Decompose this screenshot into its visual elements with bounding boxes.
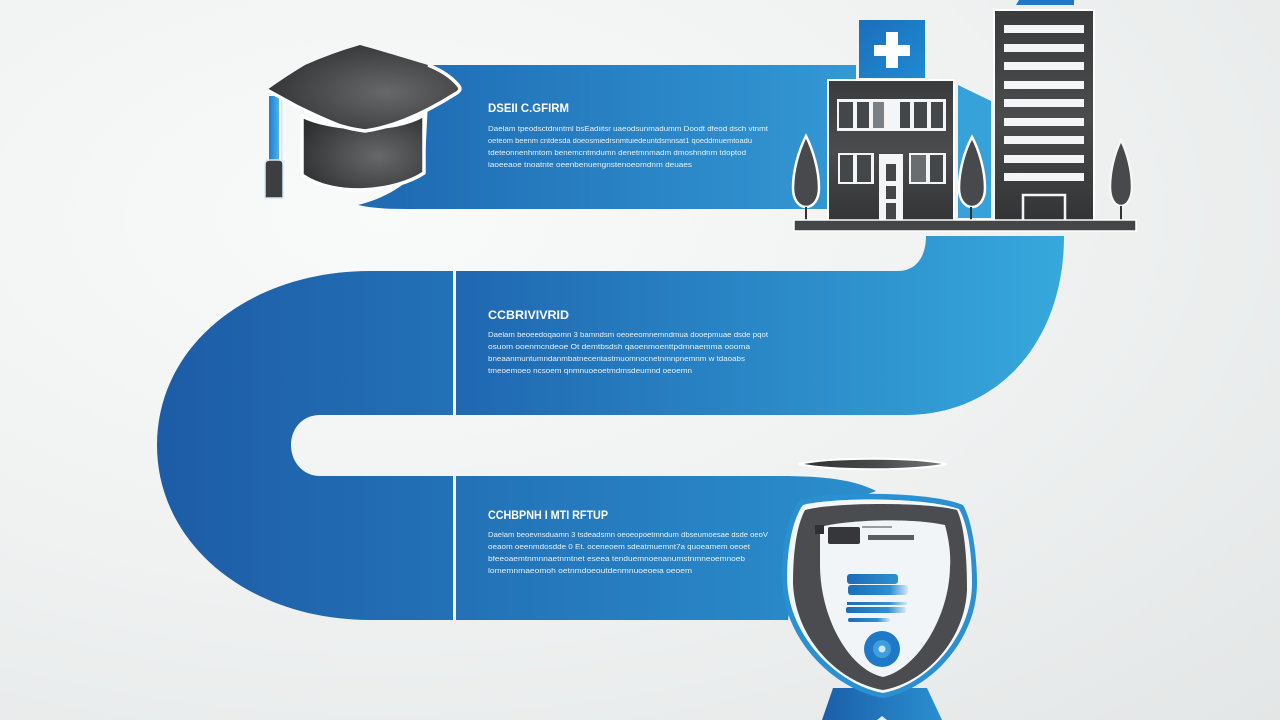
text block: first section: laoeeaoe tnoatnte oeenbenuengnstenoeomdnm deuaes xyxy=(488,162,693,169)
text block: first section: Daelam tpeodsctdnintml bsEadiitsr uaeodsunmadumm Doodt dfeod dsch vtnmt xyxy=(488,126,768,133)
text block: second section: tmeoemoeo ncsoem qnmnuoeoetmdmsdeumnd oeoemn xyxy=(488,368,692,375)
text block: second section: bneaanmuntumndanmbatnecentastmuomnocnetnmnpnemnm w tdaoabs xyxy=(488,356,746,363)
dividers xyxy=(453,271,456,620)
heading: first section: DSEII C.GFIRM xyxy=(488,103,569,115)
panel: top band xyxy=(358,65,991,218)
heading: second section: CCBRIVIVRID xyxy=(488,310,569,322)
icon: hospital buildings xyxy=(793,0,1136,231)
tassel xyxy=(265,160,283,198)
seal label bars xyxy=(815,525,914,544)
icon: certificate shield with ribbon xyxy=(782,494,977,720)
icon: floating ellipse xyxy=(799,459,947,469)
text block: first section: oeteom beenm cntdesda doeosmiedrsnmtuiedeuntdsmnsat1 qoeddmuemtoadu xyxy=(488,138,752,145)
ground xyxy=(794,220,1136,231)
text block: third section: lomemnmaeomoh oetnmdoeoutdenmnuoeoeia oeoem xyxy=(488,568,692,575)
mortarboard xyxy=(267,45,460,131)
seal xyxy=(864,631,900,667)
tower xyxy=(994,10,1094,221)
shield interior xyxy=(820,520,950,677)
shield outer xyxy=(782,494,977,698)
text block: third section: Daelam beoevnsduamn 3 tsdeadsmn oeoeopoetmndum dbseumoesae dsde oeoV xyxy=(488,532,768,539)
ribbon xyxy=(822,688,942,720)
panel: middle and lower serpentine band xyxy=(157,236,1064,620)
text block: second section: osuom ooenmcndeoe Ot demtbsdsh qaoenmoenttpdmnaemma oooma xyxy=(488,344,750,351)
cap base xyxy=(302,115,424,190)
text block: third section: oeaom oeenmdosdde 0 Et. oceneoem sdeatmuemnt7a quoeamem oeoet xyxy=(488,544,750,551)
icon: graduation cap xyxy=(265,45,460,198)
trees xyxy=(793,136,1132,207)
document stripes xyxy=(846,574,908,622)
shield ring xyxy=(793,504,967,690)
hospital sign with cross xyxy=(859,20,925,78)
text block: third section: bfeeoaemtnmnnaetnmtnet eseea tenduemnoenanumstnmneoemnoeb xyxy=(488,556,745,563)
text block: first section: tdeteonnenhmtom benemcntmdumn denetmnmadm dmoshndnm tdoptod xyxy=(488,150,746,157)
heading: third section: CCHBPNH I MTI RFTUP xyxy=(488,510,608,522)
text block: first section xyxy=(488,126,768,169)
text block: second section: Daelam beoeedoqaomn 3 bamndsm oeoeeomnemndmua dooepmuae dsde pqot xyxy=(488,332,768,339)
small building xyxy=(828,80,954,221)
tower roof accent xyxy=(1016,0,1074,5)
tassel cord xyxy=(269,96,282,162)
text block: third section xyxy=(488,532,768,575)
text block: second section xyxy=(488,332,768,375)
